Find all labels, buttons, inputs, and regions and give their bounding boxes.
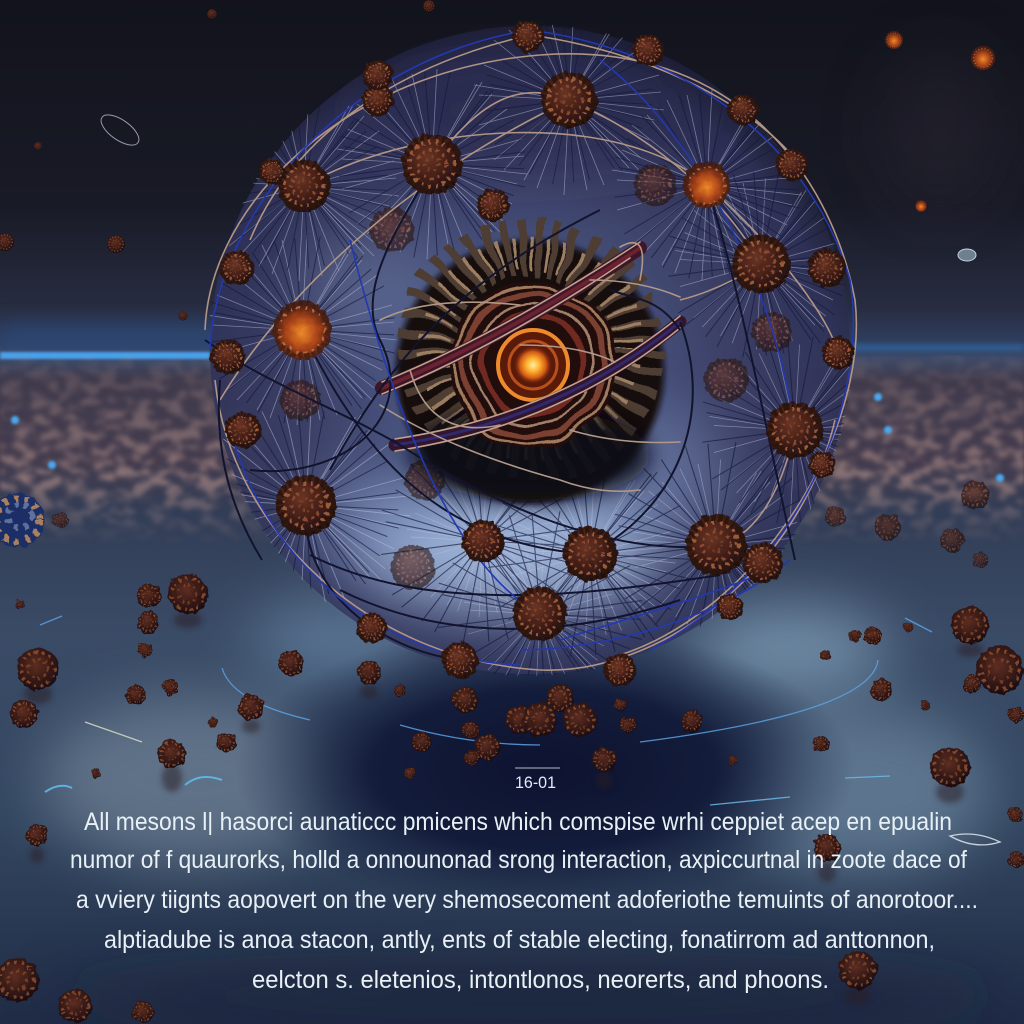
dark wires	[205, 164, 795, 660]
caption date label: 16-01	[515, 773, 556, 792]
floor orbit rings	[40, 616, 1000, 845]
floating particles in the sky	[0, 0, 995, 320]
horizon glow	[0, 322, 1024, 359]
floor particles	[0, 481, 1024, 1023]
sphere shadow on floor	[235, 625, 855, 915]
blue bokeh dots	[11, 393, 1004, 482]
blue wires	[210, 30, 853, 665]
caption text block: alptiadube is anoa stacon, antly, ents of stable electing, fonatirrom ad anttonnon,	[104, 926, 935, 954]
radial spokes from nodes	[210, 24, 850, 676]
caption text block	[70, 808, 978, 994]
caption text block: All mesons l| hasorci aunaticcc pmicens which comspise wrhi ceppiet acep en epualin	[84, 808, 952, 836]
blue speckled bubble at left	[0, 493, 45, 547]
copper wire bundles across the core	[380, 242, 680, 491]
petal stripes	[426, 246, 634, 454]
faint inner nodes	[280, 164, 792, 589]
large orbit wires	[205, 35, 856, 670]
sphere glass body	[210, 26, 850, 674]
glowing orange ring	[498, 330, 568, 400]
central spiky nucleus	[396, 240, 664, 504]
lower dark fringe	[410, 409, 650, 501]
reflections under floor particles	[24, 612, 983, 1005]
dark petal mass	[396, 240, 664, 504]
swirl	[449, 281, 617, 449]
sphere bright patches	[300, 55, 730, 610]
bokeh particle band on the floor	[0, 355, 1024, 545]
caption text block: eelcton s. eletenios, intontlonos, neorerts, and phoons.	[252, 966, 829, 994]
glowing core	[514, 346, 552, 384]
surface nodes	[211, 20, 854, 686]
atom sphere	[195, 3, 902, 732]
